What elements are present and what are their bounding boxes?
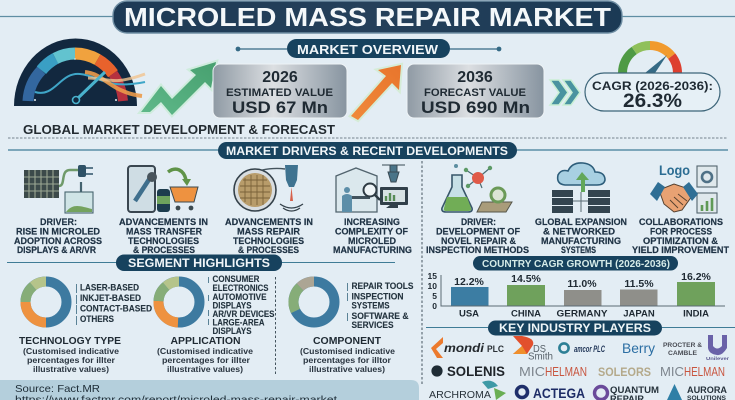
logo: ds smith: DS [533,344,546,355]
logo: quantum repair [594,385,659,400]
title: MICROLED MASS REPAIR MARKET [124,2,611,32]
logo: aurora solutions: AURORA [687,385,727,396]
legend: technology type: OTHERS [80,314,114,324]
legend: application: AR/VR DEVICES [212,309,275,319]
legend: technology type: LASER-BASED [80,282,139,292]
heading: technology type: (Customised indicative [23,347,120,356]
label: DRIVER: [461,217,496,227]
label: ADVANCEMENTS IN [119,217,208,227]
panel: source [0,380,419,400]
logo: quantum repair: QUANTUM [610,385,659,396]
logo: unilever: Unilever [706,356,729,361]
icon: cleanroom and monitor [336,165,408,212]
legend: technology type: INKJET-BASED [80,293,141,303]
label: MANUFACTURING [541,236,621,246]
heading: technology type: TECHNOLOGY TYPE [19,335,121,347]
icon: handshake: Logo [659,162,690,178]
heading: technology type: illustrative values) [33,365,109,374]
heading: market drivers: MARKET DRIVERS & RECENT DEVELOPMENTS [226,144,508,158]
donut: application [158,282,200,323]
heading: market drivers [8,142,728,159]
icon: small cagr gauge [622,46,678,73]
label [535,217,627,255]
panel: 2036 forecast value: 2036 [457,69,493,86]
logo: unilever [706,335,729,361]
legend: application: AUTOMOTIVE [212,292,267,302]
label: COMPLEXITY OF [335,226,409,236]
heading: application: percentages for illter [162,356,250,365]
label: & PROCESSES [238,245,299,255]
legend: technology type [76,282,152,325]
label [225,217,313,255]
driver: mass repair [225,165,313,255]
label [632,217,730,255]
logo: michelman: HELMAN [684,365,725,379]
bar chart: country cagr: 0 [432,301,437,311]
logo: archroma [429,381,506,400]
bar chart: country cagr: 14.5% [511,273,542,285]
panel: 2036 forecast value [407,64,544,118]
callout: cagr: CAGR (2026-2036): [592,81,713,93]
label: RISE IN MICROLED [16,226,100,236]
panel: source: Source: Fact.MR [15,383,100,395]
legend: component [348,281,414,330]
icon: speedometer gauge [14,38,145,106]
panel: 2036 forecast value: FORECAST VALUE [424,87,526,99]
heading: country cagr: COUNTRY CAGR GROWTH (2026-2036) [482,259,670,270]
icon: chip and plug [24,165,93,213]
legend: component: SERVICES [352,320,394,330]
driver: mass transfer [119,166,208,255]
panel: 2036 forecast value: USD 690 Mn [421,98,530,117]
label: TECHNOLOGIES [128,236,199,246]
heading: component: percentages for illtor [303,356,391,365]
label: DEVELOPMENT OF [436,226,521,236]
logo: soleors: SOLEORS [598,367,651,379]
heading: technology type: percentages for illter [27,356,115,365]
bar chart: country cagr: 11.0% [567,278,597,290]
icon: chevrons [550,80,580,105]
heading: global market development: GLOBAL MARKET DEVELOPMENT & FORECAST [23,123,335,137]
label: DISPLAYS & AR/VR [17,245,97,255]
heading: country cagr [473,256,678,270]
icon: phone and cart [128,166,198,212]
logo: solenis: SOLENIS [447,363,505,379]
label: MASS TRANSFER [126,226,203,236]
logo: amcor [559,343,605,354]
label [333,217,412,255]
bar chart: country cagr: 15 [428,271,437,281]
panel: 2026 estimated value: ESTIMATED VALUE [226,87,333,99]
arrow: orange growth [351,65,401,120]
label: ADOPTION ACROSS [14,236,102,246]
label: SYSTEMS [561,245,596,255]
driver: novel repair [426,164,529,255]
logo: mondi [431,337,504,358]
heading: component: (Customised indicative [300,347,396,356]
label: MASS REPAIR [237,226,301,236]
label: COLLABORATIONS [639,217,723,227]
bar chart: country cagr [428,271,725,320]
logo: michelman [519,365,587,379]
arrow: green growth [141,62,216,115]
logo: michelman: MIC [660,365,684,379]
heading: market overview [236,39,501,58]
icon: cloud and servers [552,163,610,213]
heading: component [300,335,396,374]
label: TECHNOLOGIES [233,236,304,246]
legend: application: CONSUMER [212,274,260,284]
logo: procter and gamble: CAMBLE [668,350,698,357]
logo: mondi: PLC [487,344,504,354]
callout: cagr: 26.3% [623,91,682,112]
bar chart: country cagr: 16.2% [681,271,712,283]
logo: aurora solutions [667,384,727,400]
label: & PROCESSES [133,245,195,255]
heading: key industry players: KEY INDUSTRY PLAYERS [499,323,651,335]
callout: cagr [585,73,720,112]
bar chart: country cagr: GERMANY [556,308,608,320]
donut: component [293,282,334,322]
donut: technology type [26,282,66,322]
legend: application: ELECTRONICS [212,283,269,293]
logo: michelman [660,365,725,379]
bar chart: country cagr: JAPAN [623,308,655,320]
legend: application: DISPLAYS [212,300,252,310]
heading: component: illustrative values) [309,365,385,374]
bar chart: country cagr: 10 [428,281,437,291]
heading: technology type [19,335,121,374]
driver: collaborations [632,162,730,255]
label: FOR PROCESS [650,226,712,236]
bar chart: country cagr: 5 [432,291,437,301]
heading: market overview: MARKET OVERVIEW [297,42,439,57]
logo: berry: Berry [622,340,655,356]
label: MANUFACTURING [333,245,412,255]
heading: application: (Customised indicative [157,347,254,356]
label [426,217,529,255]
legend: application: DISPLAYS [212,326,252,336]
heading: component: COMPONENT [313,335,382,347]
bar chart: country cagr: 12.2% [454,276,485,288]
bar chart: country cagr: 11.5% [624,278,654,290]
panel: 2026 estimated value: 2026 [262,69,298,86]
panel: 2026 estimated value [213,64,347,118]
label: YIELD IMPROVEMENT [632,245,730,255]
label: & NETWORKED [543,226,615,236]
legend: component: INSPECTION [352,292,404,302]
label [14,217,102,255]
logo: michelman: HELMAN [545,365,587,379]
logo: ds smith: Smith [528,352,553,362]
label: ADVANCEMENTS IN [225,217,313,227]
bar chart: country cagr: INDIA [683,308,709,320]
icon: flask and molecule [442,164,512,212]
bar chart: country cagr: CHINA [511,308,541,320]
legend: component: REPAIR TOOLS [352,281,414,291]
logo: amcor: amcor PLC [574,344,605,354]
logo: procter and gamble: PROCTER & [663,342,702,349]
heading: application: APPLICATION [170,335,240,347]
legend: technology type: CONTACT-BASED [80,304,152,314]
panel: 2026 estimated value: USD 67 Mn [232,98,328,117]
heading: key industry players [426,320,735,336]
label: OPTIMIZATION & [643,236,719,246]
driver: complexity [333,165,412,255]
heading: segment highlights [7,254,395,271]
label: DRIVER: [40,217,77,227]
logo: michelman: MIC [519,365,545,379]
legend: application [208,274,275,336]
heading: segment highlights: SEGMENT HIGHLIGHTS [128,256,270,270]
logo: mondi: mondi [444,343,485,355]
label [119,217,208,255]
legend: component: SYSTEMS [352,300,390,310]
logo: ds smith [513,336,553,362]
driver: microled adoption [14,165,102,255]
logo: procter and gamble [663,342,702,357]
heading: application: illustrative values) [167,365,243,374]
label: INCREASING [344,217,400,227]
label: INSPECTION METHODS [426,245,529,255]
label: NOVEL REPAIR & [441,236,517,246]
heading: application [157,335,254,374]
label: MICROLED [348,236,396,246]
driver: global expansion [535,163,627,255]
icon: wafer and laser [234,165,303,211]
logo: actega [516,385,585,400]
title [0,1,735,33]
label: GLOBAL EXPANSION [535,217,627,227]
legend: component: SOFTWARE & [352,311,409,321]
legend: application: LARGE-AREA [212,318,265,328]
bar chart: country cagr: USA [459,308,479,320]
